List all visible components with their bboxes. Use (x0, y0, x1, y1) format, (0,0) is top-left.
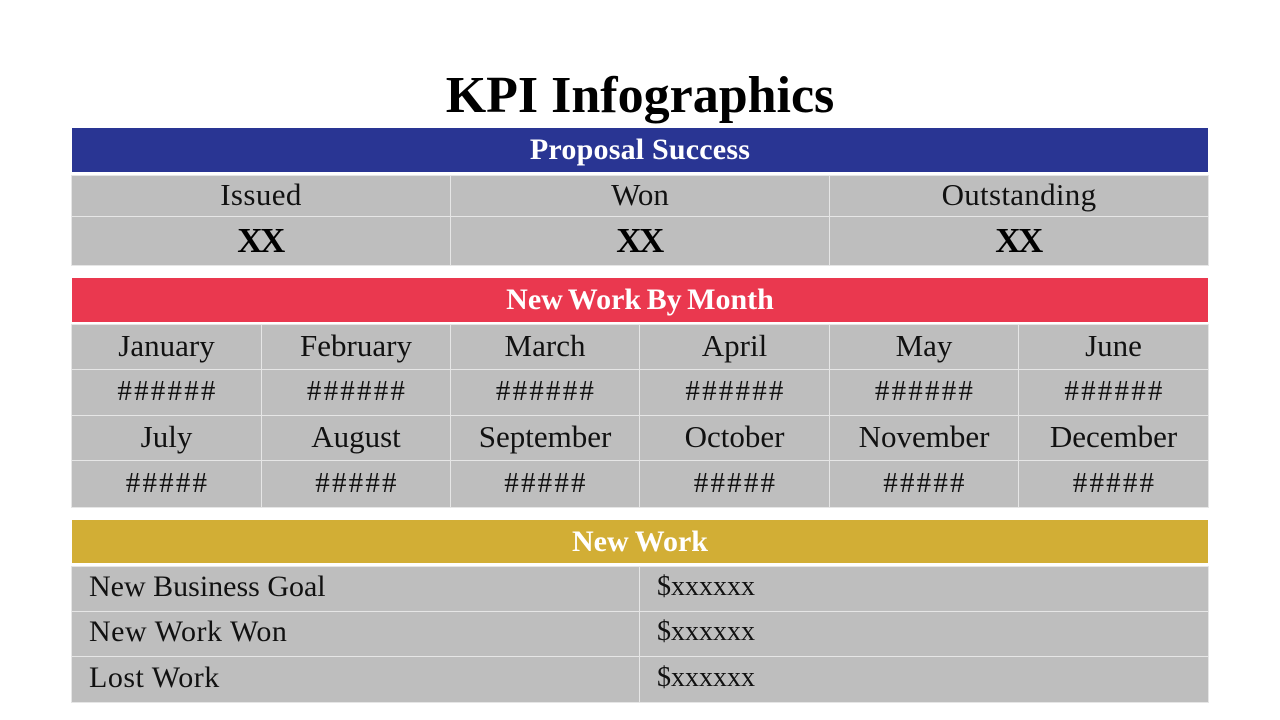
heading: new work (72, 520, 1208, 563)
value: outstanding (830, 217, 1208, 264)
month: July (72, 416, 261, 460)
value: March: ###### (496, 375, 596, 407)
value: lost work: $xxxxxx (657, 662, 755, 693)
value: October: ##### (694, 467, 777, 499)
value: March (451, 370, 639, 415)
value: June (1019, 370, 1208, 415)
month: August (262, 416, 450, 460)
cell: won (451, 176, 829, 216)
month: September: September (479, 419, 611, 454)
value: January: ###### (117, 375, 218, 407)
month: December (1019, 416, 1208, 460)
value: November (830, 461, 1018, 506)
value: May: ###### (875, 375, 975, 407)
value: April (640, 370, 829, 415)
month: September (451, 416, 639, 460)
heading: proposal success: Proposal Success (530, 133, 750, 166)
heading: new work by month (72, 278, 1208, 322)
heading: new work: New Work (572, 525, 708, 558)
month: August: August (311, 419, 401, 454)
value: May (830, 370, 1018, 415)
panel: new work (71, 520, 1209, 703)
cell: outstanding (830, 176, 1208, 216)
month: June: June (1085, 328, 1142, 363)
label: new work won: New Work Won (89, 615, 287, 648)
month: May: May (896, 328, 952, 363)
value: April: ###### (685, 375, 786, 407)
heading: proposal success (72, 128, 1208, 172)
panel: proposal success (71, 128, 1209, 266)
value: won (451, 217, 829, 264)
cell: won: Won (611, 177, 669, 212)
value: issued (72, 217, 450, 264)
label: new business goal (72, 567, 639, 611)
month: November (830, 416, 1018, 460)
month: December: December (1050, 419, 1177, 454)
month: October: October (685, 419, 784, 454)
month: January (72, 325, 261, 369)
cell: outstanding: Outstanding (942, 177, 1096, 212)
value: December (1019, 461, 1208, 506)
value: lost work (640, 657, 1208, 702)
label: new business goal: New Business Goal (89, 570, 326, 603)
month: March: March (505, 328, 585, 363)
month: July: July (141, 419, 192, 454)
cell: issued (72, 176, 450, 216)
panel: new work by month (71, 278, 1209, 508)
value: outstanding: XX (995, 221, 1041, 260)
value: November: ##### (883, 467, 967, 499)
heading: new work by month: New Work By Month (506, 283, 774, 316)
month: June (1019, 325, 1208, 369)
value: new work won: $xxxxxx (657, 616, 755, 647)
value: July: ##### (126, 467, 209, 499)
label: lost work (72, 657, 639, 702)
value: December: ##### (1073, 467, 1156, 499)
label: new work won (72, 612, 639, 656)
value: new business goal (640, 567, 1208, 611)
cell: issued: Issued (220, 177, 302, 212)
month: April (640, 325, 829, 369)
value: September: ##### (504, 467, 588, 499)
value: issued: XX (237, 221, 283, 260)
value: January (72, 370, 261, 415)
month: March (451, 325, 639, 369)
value: October (640, 461, 829, 506)
value: June: ###### (1064, 375, 1165, 407)
value: won: XX (616, 221, 662, 260)
value: February: ###### (307, 375, 407, 407)
month: May (830, 325, 1018, 369)
value: new business goal: $xxxxxx (657, 571, 755, 602)
title: KPI Infographics (446, 67, 834, 124)
value: August (262, 461, 450, 506)
value: July (72, 461, 261, 506)
month: February (262, 325, 450, 369)
month: November: November (859, 419, 989, 454)
value: new work won (640, 612, 1208, 656)
value: August: ##### (315, 467, 399, 499)
value: September (451, 461, 639, 506)
value: February (262, 370, 450, 415)
month: February: February (300, 328, 412, 363)
month: January: January (118, 328, 215, 363)
label: lost work: Lost Work (89, 661, 220, 694)
month: October (640, 416, 829, 460)
month: April: April (702, 328, 767, 363)
